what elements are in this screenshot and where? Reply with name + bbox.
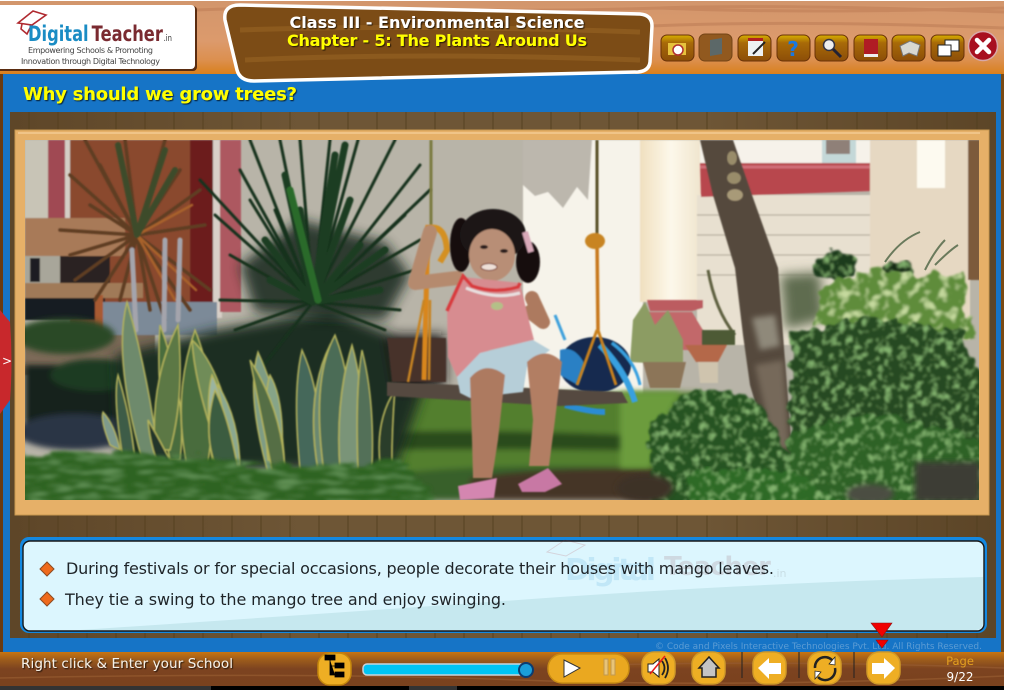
plaque heading: Class III - Environmental Science	[290, 13, 585, 32]
icon: reference book	[699, 34, 732, 61]
snake plants	[102, 302, 395, 480]
icon: help: ?	[787, 37, 799, 61]
girl: shorts	[457, 340, 550, 398]
chapter title plaque	[225, 5, 652, 81]
icon: notepad	[738, 35, 771, 61]
icon: home	[692, 652, 725, 684]
lawn patch right	[620, 392, 680, 468]
logo tagline: Innovation through Digital Technology	[21, 57, 160, 66]
play and pause capsule	[548, 654, 629, 683]
blue bag behind swing	[555, 315, 640, 412]
house wall and pillars, left	[25, 140, 241, 375]
logo card	[0, 5, 197, 71]
progress bar	[363, 663, 533, 677]
red pointer arrow	[871, 623, 892, 648]
toolbar icons	[661, 32, 998, 61]
bullet one: During festivals or for special occasions, people decorate their houses with mango leaves.	[66, 559, 774, 578]
left slide-out tab	[0, 310, 12, 414]
top wooden header bar	[0, 1, 1004, 74]
right wall, ledge and window	[645, 140, 980, 350]
logo tagline	[21, 46, 160, 66]
icon: windows	[931, 35, 964, 61]
icon: replay	[808, 652, 841, 684]
dark shrubs left	[25, 316, 126, 452]
icon: dictionary	[854, 35, 887, 61]
toolbar separators	[742, 652, 854, 678]
dark palm mass	[240, 220, 410, 320]
swing ropes	[408, 140, 616, 385]
copyright line: © Code and Pixels Interactive Technologies Pvt. Ltd. All Rights Reserved.	[655, 642, 982, 652]
page counter: Page	[946, 654, 974, 668]
logo tagline: Empowering Schools & Promoting	[28, 46, 153, 55]
watermark logo: .in	[773, 567, 787, 580]
watermark logo	[547, 540, 787, 588]
potted plants and planters	[387, 270, 735, 388]
swing seat	[387, 382, 628, 406]
red palm	[60, 140, 210, 330]
bullet text box	[20, 537, 987, 633]
icon: orange diamond bullet	[40, 562, 54, 576]
bottom control bar	[0, 652, 1004, 690]
girl: striped top	[447, 277, 534, 377]
page counter	[946, 654, 974, 684]
shadow mass behind plants	[115, 310, 445, 470]
bullet two: They tie a swing to the mango tree and enjoy swinging.	[64, 590, 506, 609]
dark spiky palm	[198, 140, 430, 332]
girl: legs	[470, 368, 505, 478]
girl	[415, 209, 562, 500]
girl: arms	[415, 232, 457, 283]
watermark logo: Digital	[565, 553, 656, 588]
plaque chapter line: Chapter - 5: The Plants Around Us	[287, 31, 587, 50]
grass foreground	[25, 448, 436, 500]
icon: help	[777, 35, 810, 61]
watermark logo: Teacher	[664, 552, 771, 582]
foreground dirt rocks	[617, 474, 673, 502]
icon: next arrow	[867, 652, 900, 684]
icon: magnifier	[815, 35, 848, 61]
girl: sandals	[458, 478, 497, 500]
tree trunk	[699, 140, 792, 454]
icon: mute speaker	[642, 652, 675, 684]
icon: open book	[892, 35, 925, 61]
photo frame	[15, 130, 989, 515]
page heading: Why should we grow trees?	[23, 84, 297, 105]
girl: pigtails and hair	[450, 218, 472, 272]
logo wordmark: DigitalTeacher.in	[28, 22, 172, 47]
left slide-out tab: >	[2, 354, 12, 368]
girl: face	[469, 229, 515, 281]
icon: graduation cap	[18, 11, 46, 34]
icon: tree menu	[318, 653, 351, 685]
page counter: 9/22	[947, 670, 973, 684]
lawn	[360, 392, 700, 500]
school prompt: Right click & Enter your School	[21, 656, 233, 672]
icon: close	[968, 32, 998, 60]
wooden plank backdrop	[10, 112, 996, 638]
icon: back arrow	[753, 652, 786, 684]
white wall and shadow	[522, 140, 702, 393]
right bushes back	[780, 232, 975, 340]
photo: girl on a swing in a garden	[15, 140, 985, 515]
right bushes front	[650, 318, 985, 510]
icon: timer folder	[661, 35, 694, 61]
icon: orange diamond bullet	[40, 592, 54, 606]
